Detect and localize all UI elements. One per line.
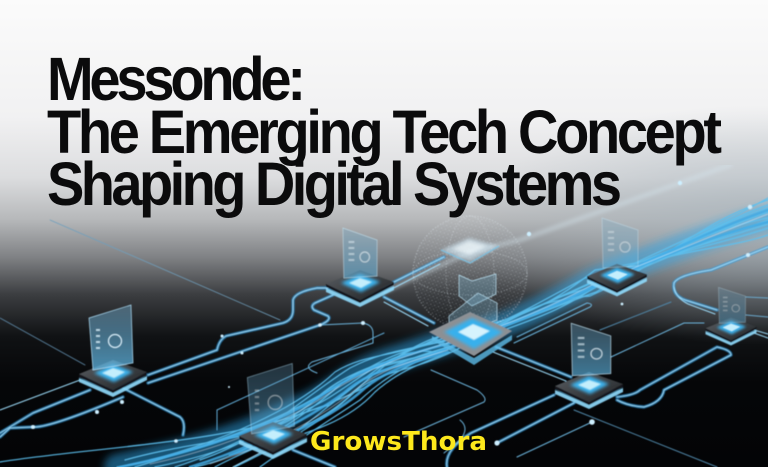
node: upper-right chip xyxy=(587,218,647,296)
stream glow body xyxy=(117,218,768,467)
title: Shaping Digital Systems xyxy=(47,151,622,219)
network scene xyxy=(0,165,768,467)
glowing dots xyxy=(31,181,752,446)
chip: main centre xyxy=(429,312,512,365)
node: far-right chip xyxy=(706,287,756,346)
title: Messonde: xyxy=(47,46,306,114)
node: bottom chip xyxy=(239,364,307,459)
cube in globe xyxy=(449,274,497,330)
node: upper-left chip xyxy=(326,228,394,307)
crisp traces xyxy=(0,220,768,467)
globe wireframe xyxy=(412,215,528,331)
title xyxy=(47,46,722,219)
node: centre-right chip xyxy=(555,323,623,409)
data stream xyxy=(0,198,768,467)
upper hazy band xyxy=(384,165,730,292)
node: left chip xyxy=(79,305,147,397)
title: The Emerging Tech Concept xyxy=(47,99,722,167)
circuit traces xyxy=(0,165,768,467)
brand label: GrowsThora xyxy=(310,427,487,457)
glow under traces xyxy=(0,247,768,467)
chip: globe top xyxy=(441,238,499,263)
